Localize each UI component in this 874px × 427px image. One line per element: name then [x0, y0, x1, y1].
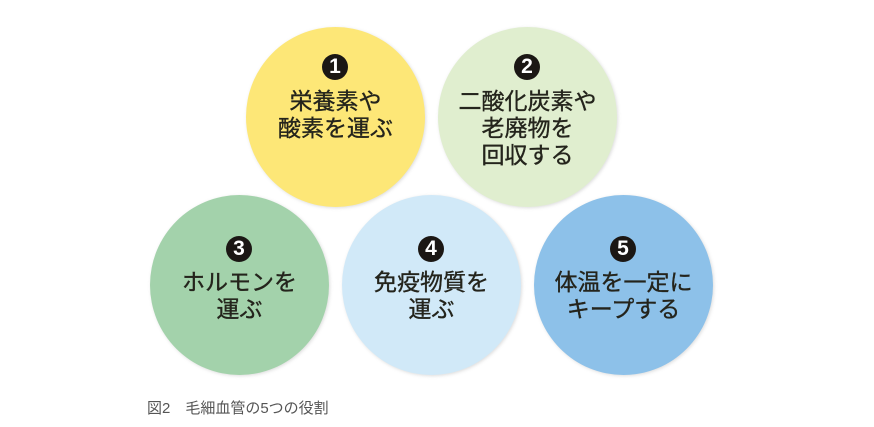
caption: 図2 毛細血管の5つの役割 — [147, 400, 329, 417]
label 2 — [458, 88, 596, 168]
number badge 4: 4 — [425, 237, 437, 260]
number badge 1: 1 — [329, 55, 341, 78]
label 2: 二酸化炭素や — [458, 88, 596, 114]
label 3: 運ぶ — [216, 296, 262, 322]
label 2: 老廃物を — [482, 115, 574, 141]
label 3: ホルモンを — [182, 269, 297, 295]
circle 4: immune substances — [342, 195, 521, 375]
label 4: 運ぶ — [408, 296, 454, 322]
label 1: 栄養素や — [290, 88, 382, 114]
number badge 1 — [322, 54, 348, 80]
label 2: 回収する — [482, 142, 574, 168]
number badge 3: 3 — [233, 237, 245, 260]
label 5 — [554, 269, 692, 322]
circle 3: hormones — [150, 195, 329, 375]
number badge 5: 5 — [617, 237, 629, 260]
label 5: キープする — [567, 296, 680, 322]
label 4 — [374, 269, 489, 322]
circle 1: nutrients and oxygen — [246, 27, 425, 207]
label 1 — [278, 88, 393, 141]
label 4: 免疫物質を — [374, 269, 489, 295]
circle 2: carbon dioxide and waste — [438, 27, 617, 207]
number badge 3 — [226, 236, 252, 262]
label 3 — [182, 269, 297, 322]
number badge 2 — [514, 54, 540, 80]
number badge 4 — [418, 236, 444, 262]
label 1: 酸素を運ぶ — [278, 115, 393, 141]
number badge 2: 2 — [521, 55, 533, 78]
label 5: 体温を一定に — [554, 269, 692, 295]
number badge 5 — [610, 236, 636, 262]
circle 5: body temperature — [534, 195, 713, 375]
